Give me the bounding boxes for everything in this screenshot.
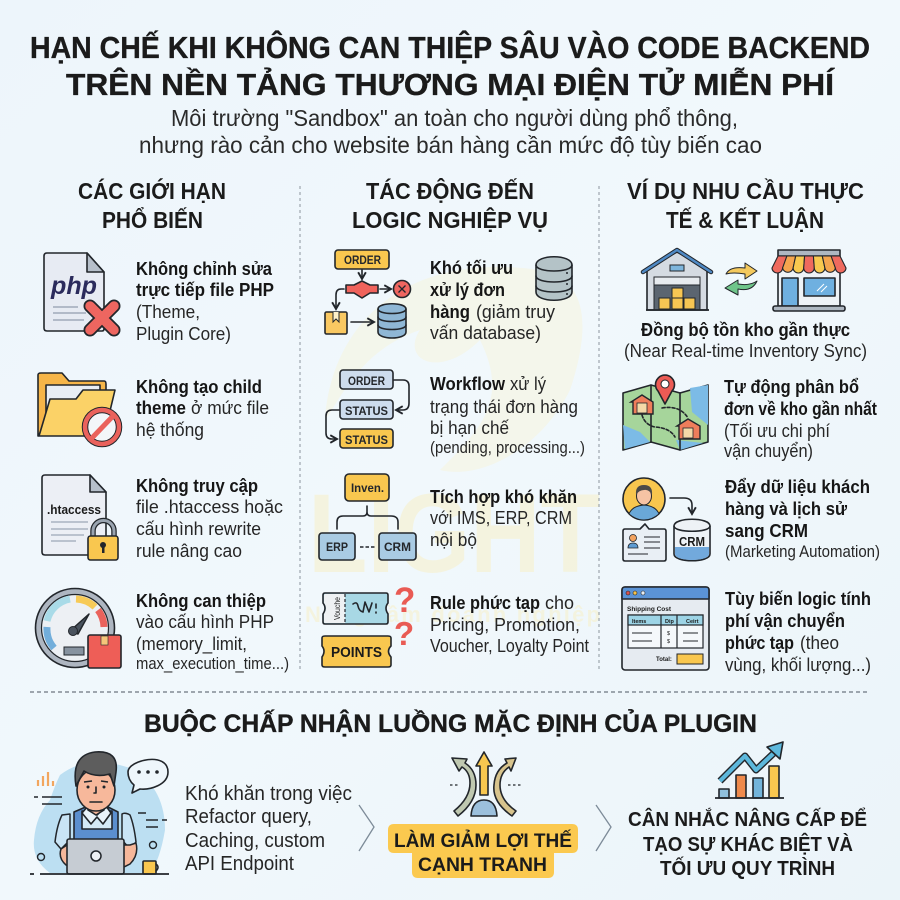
text: child theme: hệ thống [136,419,204,440]
icon: order status workflow: ORDER [348,374,385,388]
text: workflow: bị hạn chế [430,417,510,438]
text: shipping logic: (theo [800,632,839,653]
icon: shipping cost window: Shipping Cost [627,606,672,613]
text: shipping logic: phí vận chuyển [725,610,845,631]
text: refactor difficulty: API Endpoint [185,853,294,875]
heading: column 1: CÁC GIỚI HẠN [78,177,226,204]
icon: shipping cost window [622,587,709,670]
icon: voucher and points tickets: ? [394,615,414,652]
heading: column 3: VÍ DỤ NHU CẦU THỰC [627,177,864,204]
text: integration: nội bộ [430,529,477,550]
text: php file: Plugin Core) [136,323,231,344]
text: integration [430,486,577,550]
subtitle: Môi trường "Sandbox" an toàn cho người dùng phổ thông, [171,105,738,131]
icon: shipping cost window: Items [632,619,646,625]
heading: column 2: TÁC ĐỘNG ĐẾN [366,177,534,204]
text: htaccess: Không truy cập [136,475,258,496]
icon: shipping cost window: Ceirt [686,619,699,625]
icon: php file with red cross: php [50,272,97,300]
text: shipping logic: Tùy biến logic tính [725,588,871,609]
icon: inventory, ERP, CRM diagram: Inven. [351,481,384,495]
text: php file: (Theme, [136,301,200,322]
text: shipping logic: phức tạp [725,632,794,653]
watermark: faint logo: LIGHT [308,471,600,596]
heading: bottom section: BUỘC CHẤP NHẬN LUỒNG MẶC ĐỊNH CỦA PLUGIN [144,708,757,738]
panel: buộc chấp nhận luồng mặc định [30,708,867,880]
panel: tác động đến logic nghiệp vụ [319,177,589,667]
text: order processing: (giảm truy [476,301,556,322]
text: htaccess: file .htaccess hoặc [136,496,283,517]
text: complex rules [430,592,589,656]
text: push to CRM: (Marketing Automation) [725,543,880,561]
text: upgrade conclusion [628,807,867,880]
icon: order status workflow: STATUS [345,433,388,447]
icon: voucher and points tickets: POINTS [331,644,382,661]
text: htaccess [136,475,283,561]
text: push to CRM [725,476,880,561]
text: auto allocation: Tự động phân bổ [724,376,859,397]
text: integration: với IMS, ERP, CRM [430,507,572,528]
text: order processing [430,257,556,343]
icon: customer data to CRM: CRM [679,535,705,549]
heading: column 1: PHỔ BIẾN [102,206,203,233]
text: refactor difficulty: Khó khăn trong việc [185,783,352,805]
heading: column 2: LOGIC NGHIỆP VỤ [352,206,548,233]
text: refactor difficulty: Caching, custom [185,830,325,852]
icon: gauge with red box [36,588,121,668]
icon: map with warehouses and pin [623,375,708,450]
panel: ví dụ nhu cầu thực tế và kết luận [622,177,880,675]
icon: order status workflow: STATUS [345,404,388,418]
text: complex rules: Voucher, Loyalty Point [430,635,589,656]
heading: column 2 [352,177,548,233]
heading: column 3: TẾ & KẾT LUẬN [666,206,824,233]
watermark: faint logo: Nâng tầm doanh nghiệp [305,602,600,627]
icon: folder with prohibition sign [38,373,119,444]
watermark: faint logo [305,267,600,627]
text: upgrade conclusion: TỐI ƯU QUY TRÌNH [660,856,835,880]
text: htaccess: rule nâng cao [136,540,242,561]
icon: growth chart [715,742,784,798]
text: inventory sync: Đồng bộ tồn kho gần thực [641,319,850,340]
text: auto allocation: vận chuyển) [724,440,813,461]
icon: htaccess file with lock [42,475,118,560]
title [30,29,870,102]
text: php config: vào cấu hình PHP [136,611,274,632]
text: php config [136,590,289,673]
text: push to CRM: Đẩy dữ liệu khách [725,476,870,497]
panel: các giới hạn phổ biến [36,177,289,673]
text: workflow: xử lý [510,373,547,394]
icon: shipping cost window: Total: [656,657,672,663]
text: php config: (memory_limit, [136,633,247,655]
text: complex rules: Pricing, Promotion, [430,614,580,635]
text: upgrade conclusion: CÂN NHẮC NÂNG CẤP ĐỂ [628,807,867,831]
icon: htaccess file with lock: .htaccess [47,503,101,517]
text: refactor difficulty [185,783,352,875]
subtitle [139,105,762,158]
icon: order status workflow [326,370,409,448]
title: TRÊN NỀN TẢNG THƯƠNG MẠI ĐIỆN TỬ MIỄN PHÍ [66,66,835,102]
text: php config: max_execution_time...) [136,655,289,673]
text: complex rules: cho [545,592,574,613]
icon: voucher and points tickets [322,581,415,667]
text: workflow: (pending, processing...) [430,439,585,457]
callout: reduce competitive advantage: LÀM GIẢM LỢI THẾ [394,830,572,852]
text: order processing: vấn database) [430,322,541,343]
text: child theme: Không tạo child [136,376,262,397]
icon: voucher and points tickets: ? [394,581,415,620]
callout: reduce competitive advantage [388,824,578,878]
text: workflow: Workflow [430,373,506,394]
icon: order flow with database [325,250,410,338]
text: workflow: trạng thái đơn hàng [430,396,578,417]
text: inventory sync [624,319,867,361]
icon: shipping cost window: $ [667,639,670,645]
icon: customer data to CRM [623,478,710,561]
text: refactor difficulty: Refactor query, [185,806,312,828]
text: child theme [136,376,269,440]
heading: column 1 [78,177,226,233]
arrow: chevron 1 [359,805,374,851]
icon: inventory, ERP, CRM diagram [319,474,416,560]
text: auto allocation [724,376,877,461]
text: auto allocation: (Tối ưu chi phí [724,420,831,441]
icon: inventory, ERP, CRM diagram: ERP [326,540,348,554]
text: order processing: xử lý đơn [430,279,505,300]
text: php file: trực tiếp file PHP [136,279,274,300]
subtitle: nhưng rào cản cho website bán hàng cần mức độ tùy biến cao [139,132,762,158]
text: child theme: theme [136,397,186,418]
text: child theme: ở mức file [191,397,269,418]
text: workflow [430,373,585,457]
icon: shop [772,250,846,311]
text: order processing: Khó tối ưu [430,257,513,278]
text: order processing: hàng [430,301,470,322]
text: php file [136,258,274,344]
icon: developer at laptop [30,752,169,874]
text: shipping logic: vùng, khối lượng...) [725,654,871,675]
text: push to CRM: hàng và lịch sử [725,498,848,519]
text: shipping logic [725,588,871,675]
text: inventory sync: (Near Real-time Inventory Sync) [624,340,867,361]
text: htaccess: cấu hình rewrite [136,518,261,539]
icon: shipping cost window: Dip [665,619,674,625]
icon: voucher and points tickets: Vouche [332,597,342,620]
text: integration: Tích hợp khó khăn [430,486,577,507]
icon: php file with red cross [44,253,114,331]
text: php config: Không can thiệp [136,590,266,611]
icon: warehouse [643,250,711,310]
icon: shipping cost window: $ [667,631,670,637]
heading: column 3 [627,177,864,233]
callout: reduce competitive advantage: CẠNH TRANH [418,855,547,876]
icon: inventory, ERP, CRM diagram: CRM [384,540,411,554]
text: complex rules: Rule phức tạp [430,592,540,613]
text: upgrade conclusion: TẠO SỰ KHÁC BIỆT VÀ [643,832,853,856]
icon: diverging arrows over dome [450,752,522,816]
icon: order flow with database: ORDER [344,253,381,267]
text: php file: Không chỉnh sửa [136,258,273,279]
icon: database [536,257,572,300]
arrow: chevron 2 [596,805,611,851]
icon: sync arrows [725,263,757,295]
text: push to CRM: sang CRM [725,520,808,541]
